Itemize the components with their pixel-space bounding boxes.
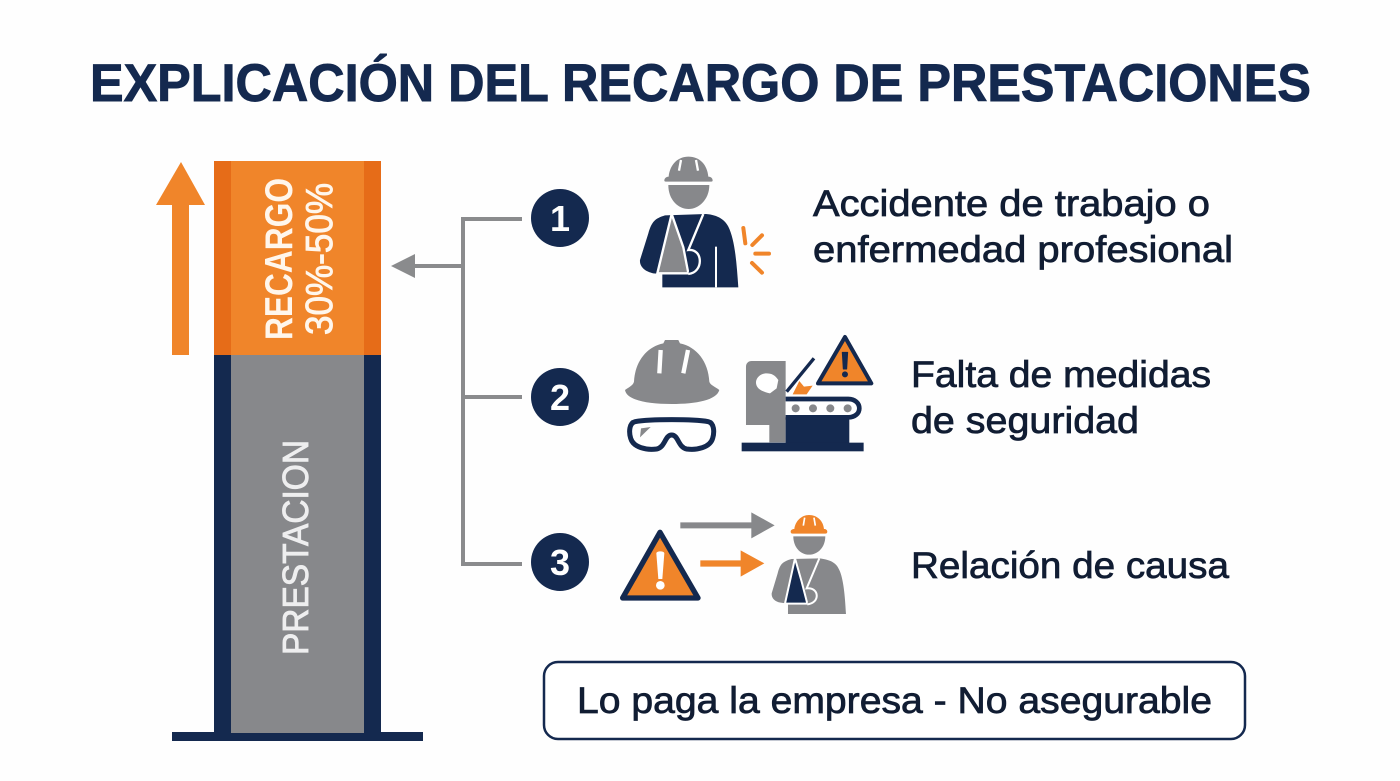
number badge 1: 1 — [550, 198, 570, 239]
number badge 2 — [531, 368, 589, 426]
number badge 2: 2 — [550, 377, 570, 418]
icon: injured worker — [640, 157, 769, 287]
base line — [172, 732, 423, 741]
number badge 3 — [531, 533, 589, 591]
title: EXPLICACIÓN DEL RECARGO DE PRESTACIONES — [90, 53, 1311, 113]
text: cause relation: Relación de causa — [911, 545, 1229, 586]
text: accident: Accidente de trabajo o — [813, 183, 1210, 224]
icon: cause relation — [623, 512, 846, 614]
bar segment: recargo — [214, 161, 381, 355]
number badge 3: 3 — [550, 542, 570, 583]
bar segment: prestación — [214, 355, 381, 733]
text: safety measures: Falta de medidas — [911, 354, 1211, 395]
upward arrow — [156, 162, 205, 355]
text: accident: enfermedad profesional — [813, 229, 1233, 270]
text: safety measures — [911, 354, 1211, 441]
stacked bar — [172, 161, 423, 741]
text: accident — [813, 183, 1233, 270]
connector bracket with arrow — [391, 219, 522, 564]
number badge 1 — [531, 189, 589, 247]
callout — [544, 662, 1245, 739]
text: safety measures: de seguridad — [911, 400, 1139, 441]
callout: Lo paga la empresa - No asegurable — [577, 680, 1212, 721]
bar segment: recargo: 30%-50% — [299, 183, 341, 335]
bar segment: recargo: RECARGO — [258, 178, 301, 340]
icon: safety gear and machine — [625, 337, 871, 451]
bar segment: prestación: PRESTACION — [275, 440, 316, 655]
